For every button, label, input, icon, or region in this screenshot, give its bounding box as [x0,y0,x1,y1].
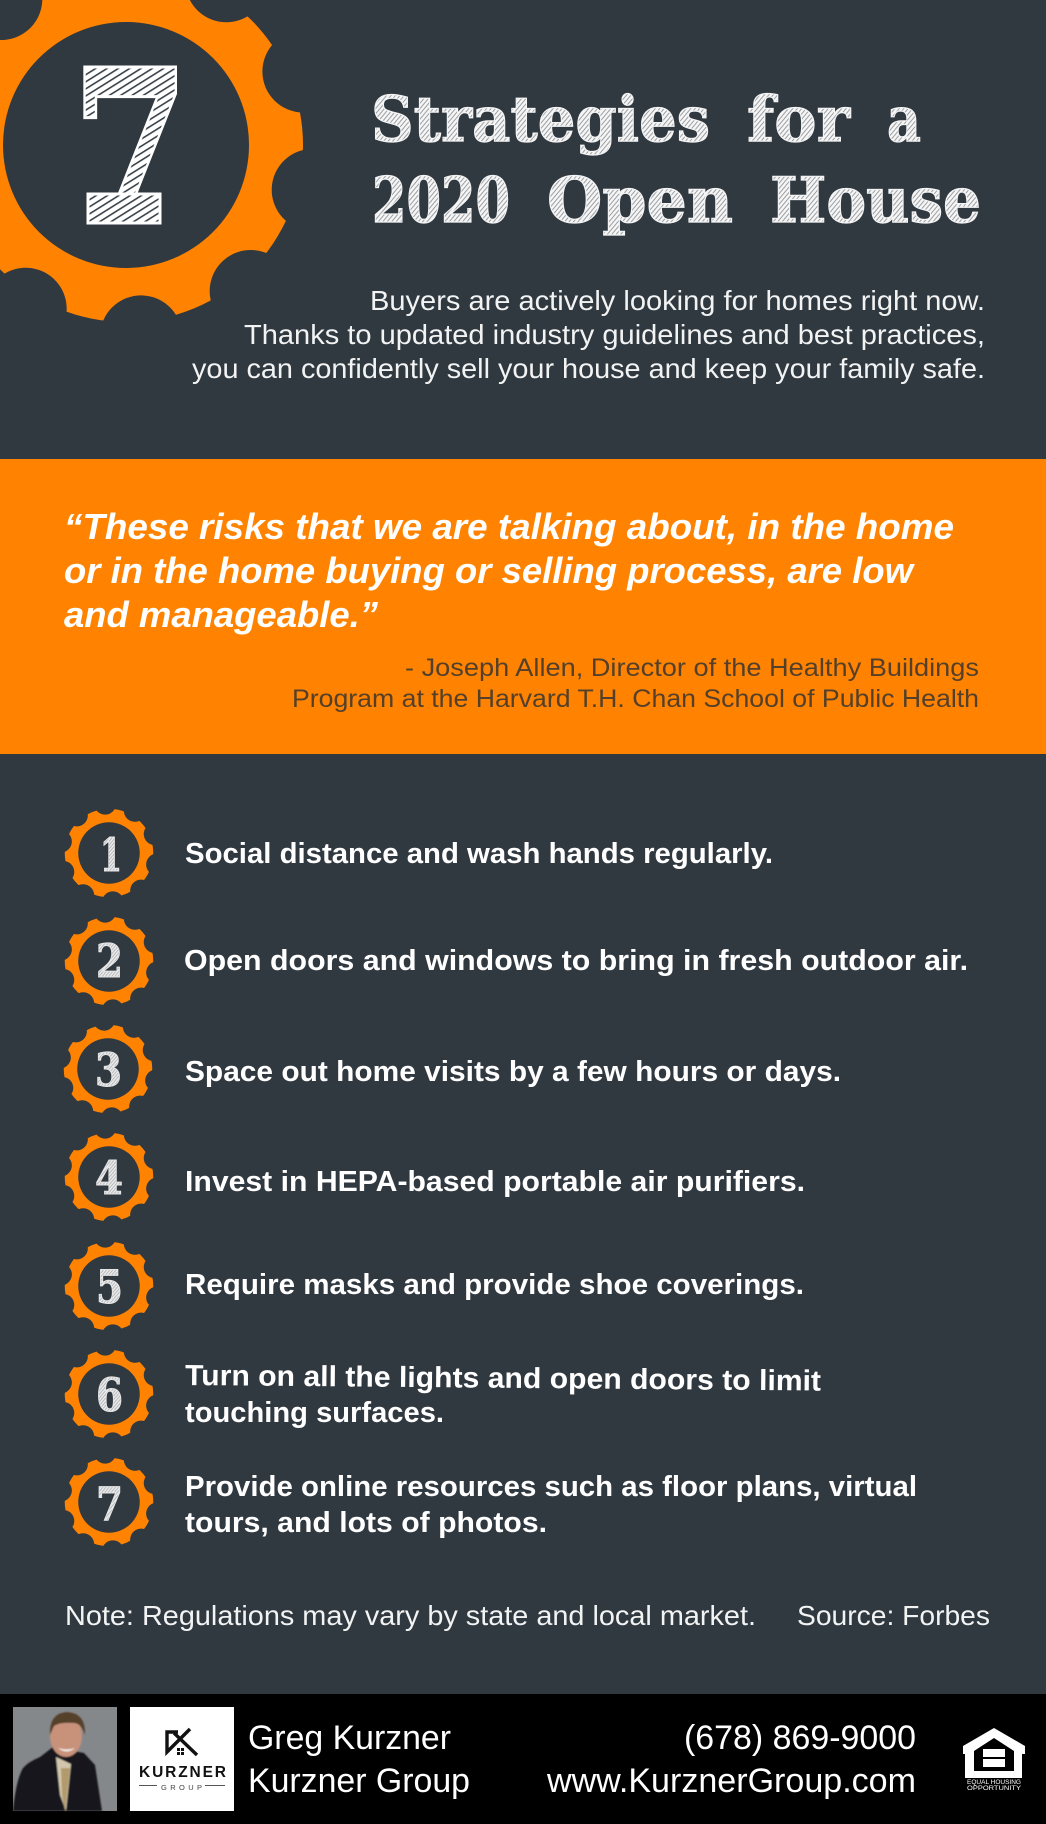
agent name and company: Greg Kurzner [248,1719,451,1757]
strategy 1: Social distance and wash hands regularly. [185,838,773,870]
strategy 2: 2 [96,934,123,988]
strategy 7: tours, and lots of photos. [185,1507,547,1539]
strategy 7 [48,1441,917,1563]
logo mark [167,1729,197,1755]
strategy 6: 6 [96,1368,123,1422]
strategy 6: touching surfaces. [185,1397,444,1429]
icon: equal housing opportunity: EQUAL HOUSING [967,1779,1021,1786]
quote text: “These risks that we are talking about, in the home [64,506,954,547]
strategy 6 [48,1333,822,1455]
title: a [887,82,921,156]
agent name and company [248,1719,470,1800]
strategy 5 [48,1225,804,1347]
strategy 3: Space out home visits by a few hours or days. [185,1056,841,1088]
strategy 5: 5 [96,1260,123,1314]
intro text block: Buyers are actively looking for homes right now. [370,285,985,316]
strategy 4: Invest in HEPA-based portable air purifiers. [185,1166,805,1198]
agent name and company: Kurzner Group [248,1762,470,1800]
strategy 4 [48,1116,805,1238]
intro text block: Thanks to updated industry guidelines and best practices, [244,319,985,350]
header gear with numeral 7 [0,0,362,380]
title: Strategies [371,82,710,156]
company logo: GROUP [161,1783,202,1792]
intro text block: you can confidently sell your house and keep your family safe. [192,353,985,384]
icon: equal housing opportunity: OPPORTUNITY [967,1785,1022,1792]
quote text: and manageable.” [64,594,378,635]
strategy 7: 7 [96,1477,123,1531]
phone and website: www.KurznerGroup.com [546,1762,916,1800]
panel: footer [0,1694,1046,1824]
strategy 4: 4 [95,1151,123,1205]
strategy 5: Require masks and provide shoe coverings. [185,1269,804,1301]
quote text [64,506,954,635]
title: for [747,82,851,156]
quote attribution: - Joseph Allen, Director of the Healthy Buildings [405,654,979,682]
title: Open [547,163,733,237]
strategy 6: Turn on all the lights and open doors to limit [185,1360,822,1398]
agent photo [13,1707,117,1811]
note and source: Source: Forbes [797,1600,990,1631]
title: House [770,163,981,237]
strategy 7: Provide online resources such as floor plans, virtual [185,1471,917,1503]
strategy 1: 1 [100,828,122,882]
company logo: KURZNER [139,1764,226,1781]
icon: equal housing opportunity [963,1728,1025,1792]
strategy 3: 3 [95,1043,122,1097]
phone and website [546,1719,916,1800]
strategy 2 [48,900,968,1022]
strategy 3 [47,1008,841,1130]
note and source: Note: Regulations may vary by state and local market. [65,1600,756,1631]
company logo [130,1707,234,1811]
quote attribution: Program at the Harvard T.H. Chan School of Public Health [292,685,979,713]
strategy 1 [48,792,773,914]
panel: orange quote band [0,459,1046,754]
numeral 7: 7 [71,23,190,274]
intro text block [192,285,985,384]
title [371,82,981,237]
quote text: or in the home buying or selling process, are low [64,550,915,591]
title: 2020 [372,163,510,237]
quote attribution [292,654,979,713]
phone and website: (678) 869-9000 [684,1719,916,1757]
strategy 2: Open doors and windows to bring in fresh outdoor air. [184,945,968,977]
